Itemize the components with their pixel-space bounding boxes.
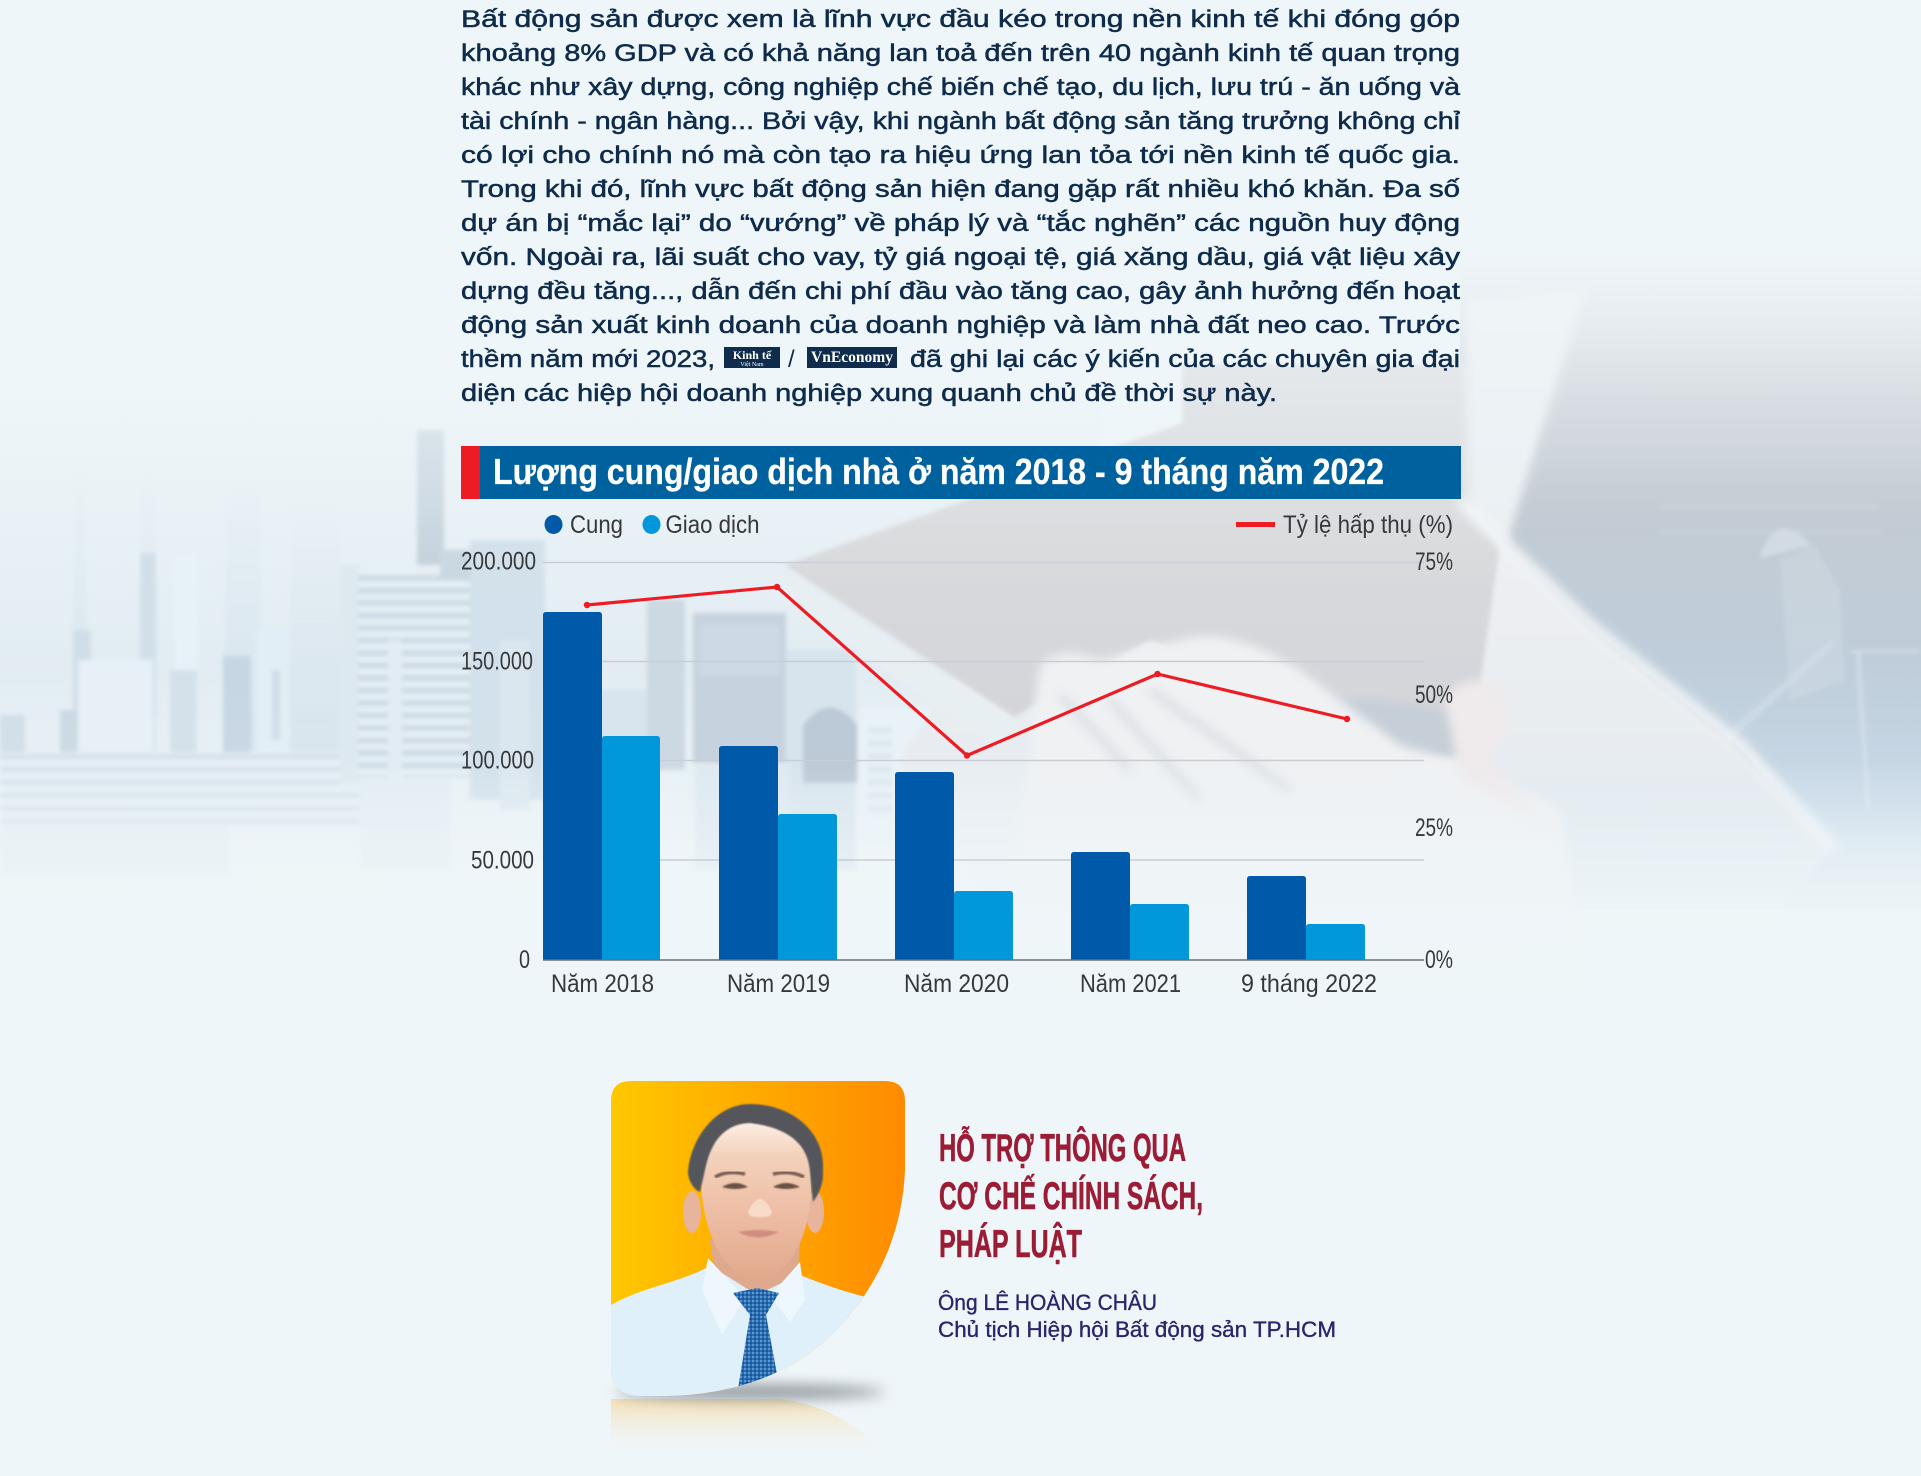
bars 9 months 2022 — [1247, 876, 1365, 960]
legend: transactions: Giao dịch — [666, 511, 760, 539]
tie — [733, 1288, 779, 1395]
quote heading — [939, 1125, 1203, 1266]
central towers — [543, 600, 1010, 870]
haze behind skyline — [0, 380, 1100, 900]
intro paragraph: đã ghi lại các ý kiến của các chuyên gia đại — [910, 346, 1460, 373]
intro paragraph: Trong khi đó, lĩnh vực bất động sản hiện đang gặp rất nhiều khó khăn. Đa số — [461, 176, 1460, 203]
collar — [702, 1258, 745, 1335]
left axis labels — [461, 548, 536, 974]
neck — [710, 1240, 800, 1295]
shirt — [611, 1268, 880, 1400]
chart heading bar: Lượng cung/giao dịch nhà ở năm 2018 - 9 tháng năm 2022 — [493, 451, 1384, 492]
ears — [683, 1191, 701, 1233]
face — [701, 1122, 812, 1254]
left axis labels: 50.000 — [471, 846, 534, 874]
legend: supply — [544, 511, 623, 539]
skyline at left — [0, 430, 545, 875]
right axis labels: 50% — [1415, 681, 1453, 709]
intro paragraph: vốn. Ngoài ra, lãi suất cho vay, tỷ giá ngoại tệ, giá xăng dầu, giá vật liệu xây — [461, 244, 1460, 271]
hand and fingers — [1010, 636, 1590, 1000]
intro paragraph: thềm năm mới 2023, — [461, 346, 715, 373]
speaker name and title — [938, 1290, 1336, 1342]
gridlines — [543, 562, 1424, 860]
right axis labels: 0% — [1425, 946, 1453, 974]
logo: Kinh tế Việt Nam — [724, 347, 780, 368]
card shadow — [615, 1385, 885, 1399]
shadow under tablet — [1300, 700, 1470, 760]
intro paragraph: tài chính - ngân hàng... Bởi vậy, khi ngành bất động sản tăng trưởng không chỉ — [461, 108, 1461, 135]
x axis labels: Năm 2019 — [727, 970, 830, 998]
worker silhouette — [1660, 505, 1920, 810]
bars 2018 — [543, 612, 660, 960]
legend: supply: Cung — [570, 511, 623, 539]
intro paragraph — [461, 6, 1461, 407]
left axis labels: 0 — [519, 946, 530, 974]
x axis labels: Năm 2020 — [904, 970, 1009, 998]
construction area at right — [1460, 250, 1921, 910]
hair — [688, 1104, 823, 1202]
axis baseline — [543, 959, 1424, 961]
logo: VnEconomy: VnEconomy — [811, 349, 893, 366]
card reflection — [611, 1399, 885, 1458]
bars 2020 — [895, 772, 1013, 960]
absorption rate line — [584, 584, 1350, 759]
intro paragraph: có lợi cho chính nó mà còn tạo ra hiệu ứng lan tỏa tới nền kinh tế quốc gia. — [461, 142, 1460, 169]
x axis labels: 9 tháng 2022 — [1241, 970, 1377, 998]
left axis labels: 200.000 — [461, 548, 536, 576]
speaker name and title: Chủ tịch Hiệp hội Bất động sản TP.HCM — [938, 1317, 1336, 1342]
bright strip above tablet — [1466, 290, 1585, 548]
nose — [748, 1199, 772, 1217]
quote heading: CƠ CHẾ CHÍNH SÁCH, — [939, 1174, 1203, 1218]
left axis labels: 100.000 — [461, 746, 534, 774]
intro paragraph: khác như xây dựng, công nghiệp chế biến chế tạo, du lịch, lưu trú - ăn uống và — [461, 74, 1461, 101]
quote heading: HỖ TRỢ THÔNG QUA — [939, 1125, 1186, 1170]
chart: housing supply, transactions and absorption rate — [461, 511, 1453, 998]
x axis labels: Năm 2021 — [1080, 970, 1181, 998]
tablet bezel — [900, 505, 1832, 1000]
logo: Kinh tế Việt Nam: Kinh tế — [733, 348, 772, 362]
eyes — [722, 1183, 748, 1189]
background photo: city skyline, tablet, hands and construction worker — [0, 250, 1921, 1045]
bars 2021 — [1071, 852, 1189, 960]
right axis labels — [1415, 548, 1453, 974]
x axis labels — [551, 970, 1377, 998]
intro paragraph: dự án bị “mắc lại” do “vướng” về pháp lý và “tắc nghẽn” các nguồn huy động — [461, 210, 1460, 237]
left axis labels: 150.000 — [461, 648, 533, 676]
portrait of Lê Hoàng Châu — [611, 1104, 880, 1400]
portrait card — [611, 1081, 905, 1458]
right axis labels: 75% — [1415, 548, 1453, 576]
intro paragraph: dựng đều tăng..., dẫn đến chi phí đầu vào tăng cao, gây ảnh hưởng đến hoạt — [461, 278, 1460, 305]
intro paragraph: diện các hiệp hội doanh nghiệp xung quanh chủ đề thời sự này. — [461, 380, 1277, 407]
x axis labels: Năm 2018 — [551, 970, 654, 998]
tablet lower-left edge — [768, 570, 1016, 748]
intro paragraph: Bất động sản được xem là lĩnh vực đầu kéo trong nền kinh tế khi đóng góp — [461, 6, 1460, 33]
speaker name and title: Ông LÊ HOÀNG CHÂU — [938, 1290, 1157, 1315]
eyebrows — [715, 1173, 745, 1177]
bezel bright edge — [1460, 500, 1835, 850]
card background — [611, 1081, 905, 1396]
tablet screen — [785, 365, 1500, 755]
intro paragraph: động sản xuất kinh doanh của doanh nghiệp và làm nhà đất neo cao. Trước — [461, 312, 1460, 339]
logo: Kinh tế Việt Nam: Việt Nam — [740, 362, 764, 368]
mouth — [738, 1230, 779, 1238]
quote heading: PHÁP LUẬT — [939, 1222, 1082, 1266]
bars 2019 — [719, 746, 837, 960]
fade to page colour — [0, 760, 1921, 1045]
intro paragraph: / — [788, 346, 795, 373]
legend: absorption rate: Tỷ lệ hấp thụ (%) — [1283, 511, 1453, 539]
right axis labels: 25% — [1415, 814, 1453, 842]
intro paragraph: khoảng 8% GDP và có khả năng lan toả đến trên 40 ngành kinh tế quan trọng — [461, 40, 1460, 67]
